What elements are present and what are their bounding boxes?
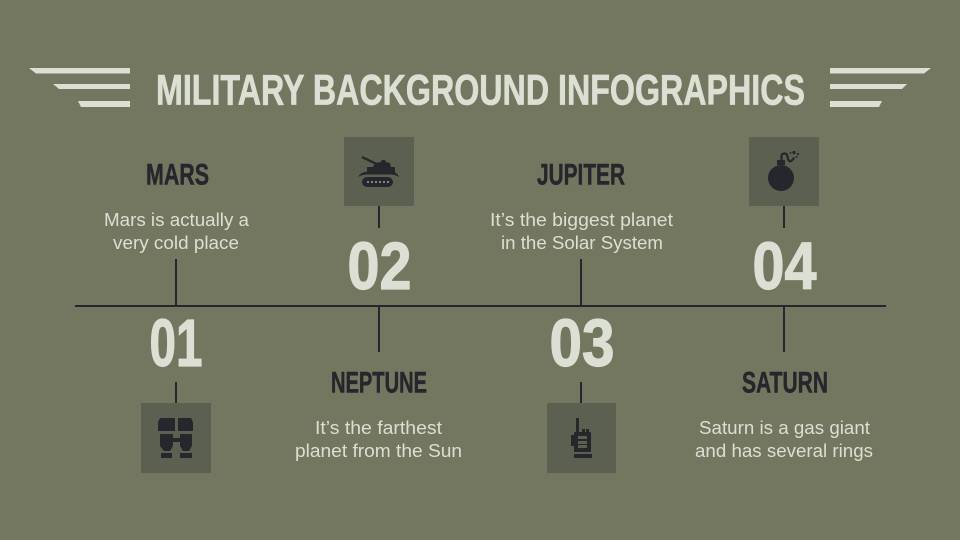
text: Mars description: very cold place — [113, 233, 239, 253]
text: Mars description — [104, 210, 250, 253]
text: Neptune description: It’s the farthest — [315, 418, 442, 438]
text: Jupiter description: It’s the biggest planet — [490, 210, 673, 230]
heading: Saturn: SATURN — [742, 366, 828, 400]
heading: Mars: MARS — [146, 158, 209, 192]
number 03: 03 — [550, 306, 614, 381]
connector up — [580, 259, 582, 306]
number 01: 01 — [150, 306, 202, 381]
text: Neptune description — [295, 418, 462, 461]
icon: binoculars — [158, 418, 193, 458]
connector up — [783, 206, 785, 228]
connector down — [580, 382, 582, 403]
number 02: 02 — [348, 229, 412, 304]
number 04: 04 — [752, 229, 816, 304]
text: Mars description: Mars is actually a — [104, 210, 250, 230]
step 2: Neptune — [295, 137, 462, 461]
connector up — [175, 259, 177, 306]
icon: bomb — [768, 151, 799, 191]
icon panel: radio — [547, 403, 616, 473]
left wing ornament — [29, 68, 130, 107]
text: Jupiter description: in the Solar System — [501, 233, 663, 253]
heading: Jupiter: JUPITER — [537, 158, 625, 192]
step 4: Saturn — [695, 137, 873, 461]
connector down — [378, 306, 380, 352]
step 1: Mars — [104, 158, 250, 473]
text: Neptune description: planet from the Sun — [295, 441, 462, 461]
connector down — [175, 382, 177, 403]
text: Jupiter description — [490, 210, 673, 253]
step 3: Jupiter — [490, 158, 673, 473]
connector down — [783, 306, 785, 352]
icon: tank — [358, 156, 399, 187]
icon panel: binoculars — [141, 403, 211, 473]
text: Saturn description: Saturn is a gas giant — [699, 418, 870, 438]
text: Saturn description — [695, 418, 873, 461]
icon panel: bomb — [749, 137, 819, 206]
timeline axis — [75, 305, 886, 307]
heading: Neptune: NEPTUNE — [331, 366, 427, 400]
text: Saturn description: and has several rings — [695, 441, 873, 461]
icon: walkie-talkie — [571, 418, 592, 458]
right wing ornament — [830, 68, 931, 107]
icon panel: tank — [344, 137, 414, 206]
connector up — [378, 206, 380, 228]
